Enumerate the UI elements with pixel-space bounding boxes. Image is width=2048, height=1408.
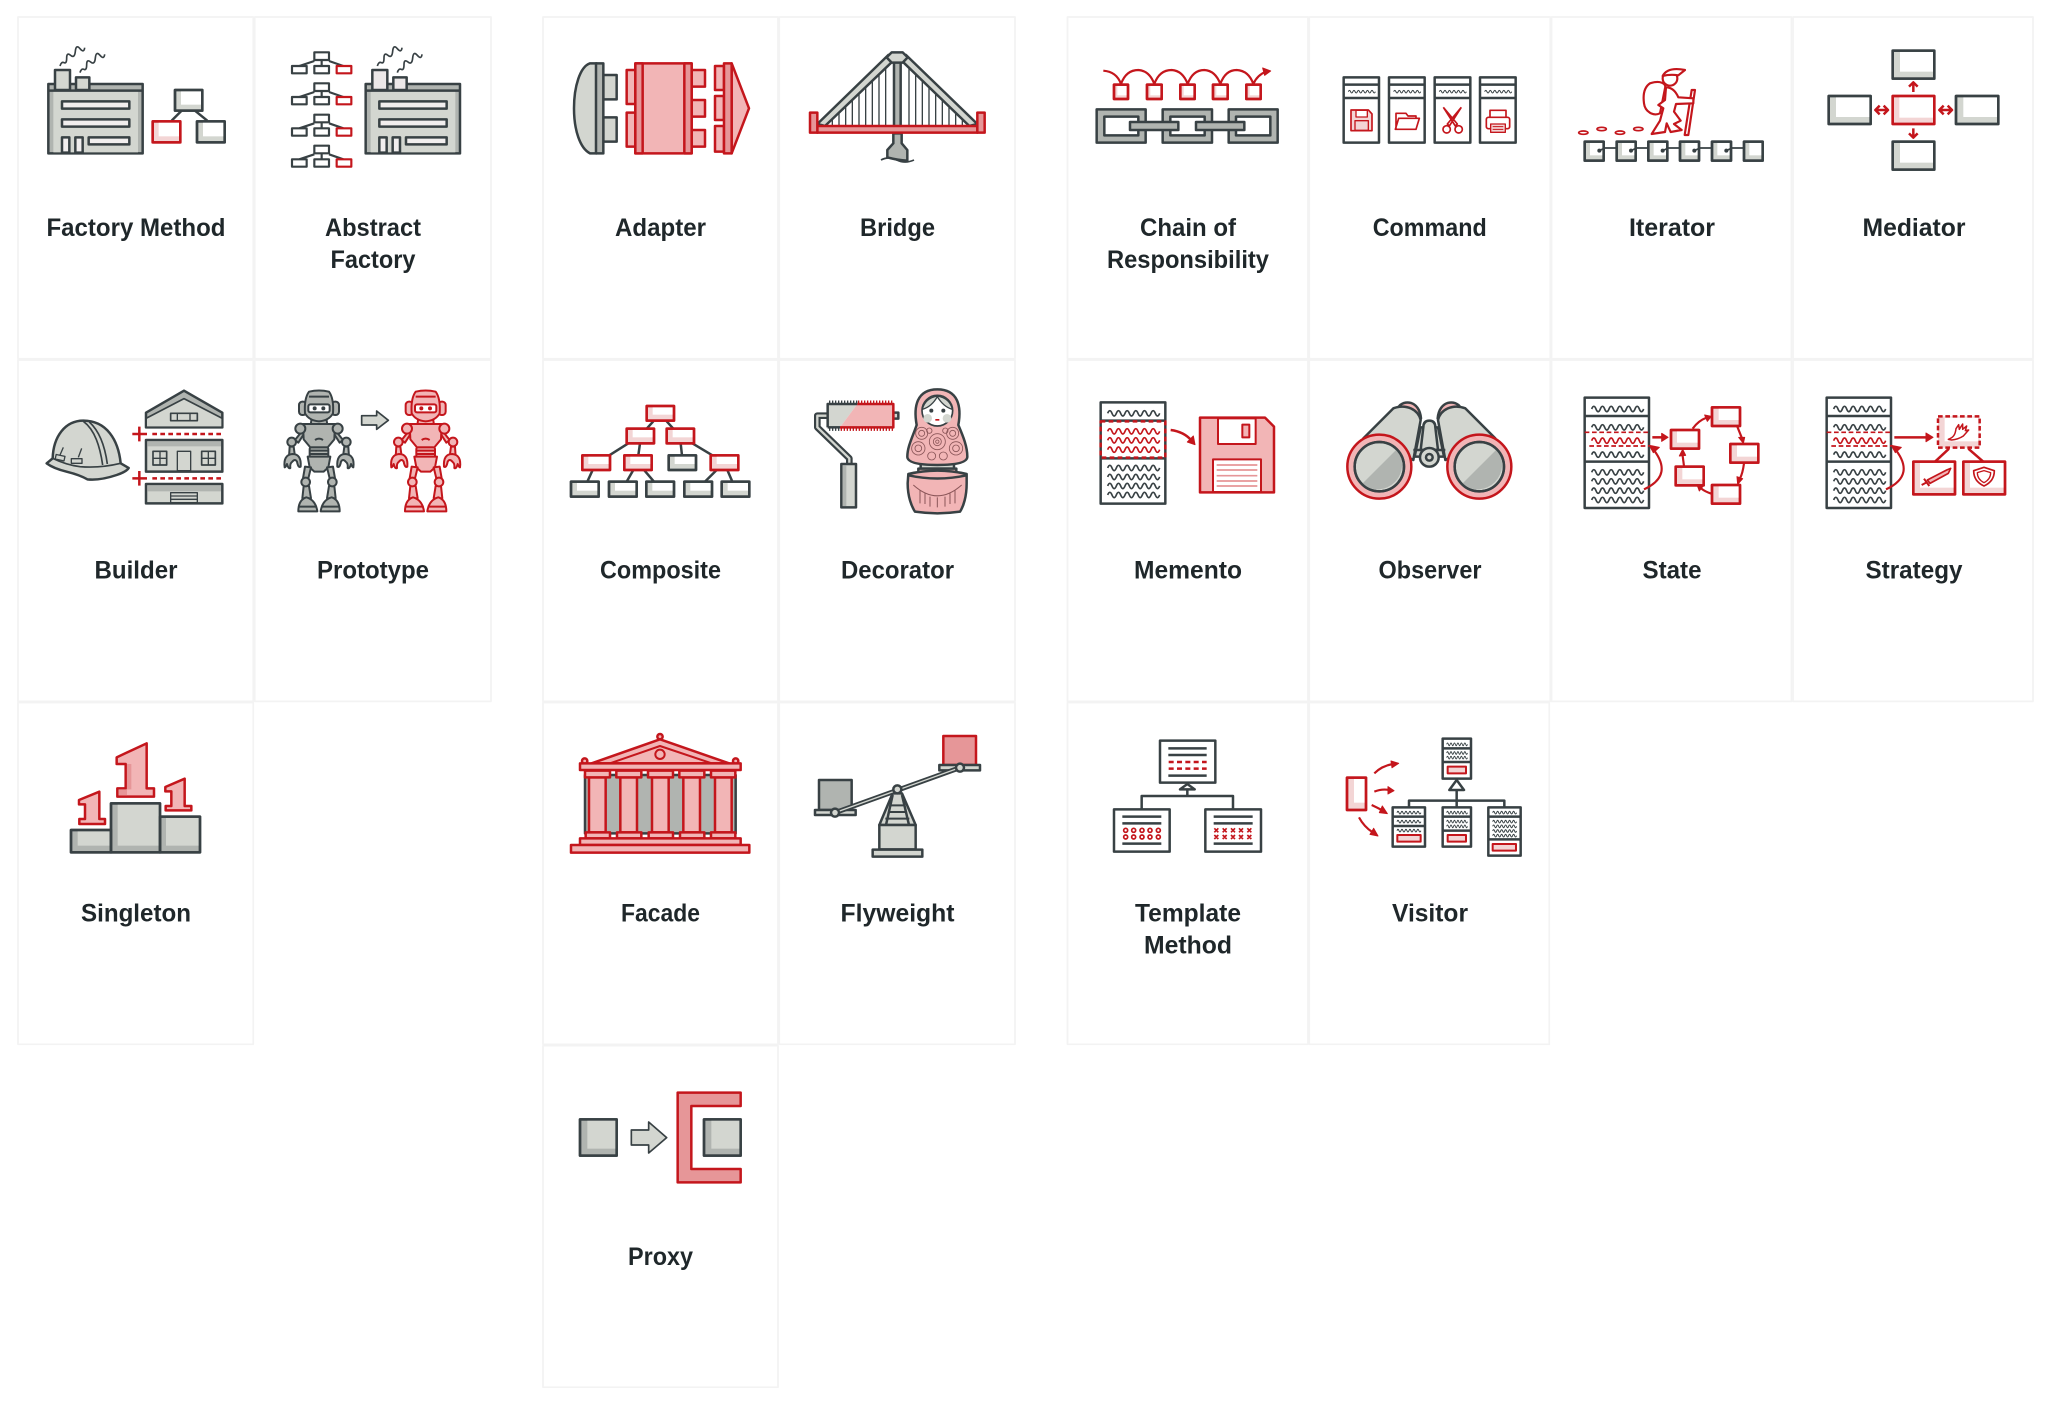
panel: Iterator	[1552, 17, 1792, 359]
icon: hard hat and house parts	[47, 391, 222, 503]
icon: composite tree	[571, 406, 749, 497]
icon: hiker walking on a linked list	[1579, 69, 1763, 161]
label: Chain of Responsibility: Responsibility	[1107, 246, 1269, 274]
icon: binoculars	[1347, 402, 1511, 499]
label: Builder: Builder	[94, 556, 178, 584]
label: Visitor: Visitor	[1392, 900, 1468, 928]
panel: Command	[1309, 17, 1550, 359]
panel: Strategy	[1793, 360, 2033, 701]
label: Abstract Factory: Abstract	[325, 214, 422, 242]
label: Template Method: Method	[1144, 932, 1232, 960]
icon: document with state machine	[1585, 398, 1758, 508]
panel: Composite	[543, 360, 778, 701]
icon: plug adapter	[574, 63, 749, 153]
icon: visitor and class hierarchy	[1347, 739, 1521, 856]
panel: Decorator	[779, 360, 1015, 701]
panel: Mediator	[1793, 17, 2033, 359]
label: Abstract Factory	[325, 214, 422, 274]
icon: seesaw with weights	[815, 736, 980, 857]
label: Bridge: Bridge	[860, 214, 935, 242]
panel: Singleton	[18, 702, 253, 1044]
label: Adapter: Adapter	[615, 214, 706, 242]
icon: paint roller and nesting doll	[817, 389, 967, 513]
panel: Proxy	[543, 1046, 778, 1387]
label: Memento: Memento	[1134, 556, 1242, 584]
icon: template class hierarchy	[1114, 741, 1261, 852]
label: Strategy: Strategy	[1866, 556, 1963, 584]
icon: suspension bridge	[810, 52, 985, 162]
icon: document with strategy options	[1827, 398, 2005, 508]
label: Iterator: Iterator	[1629, 214, 1715, 242]
icon: podium with number ones	[71, 743, 200, 852]
panel: Template Method	[1068, 702, 1308, 1044]
label: State: State	[1642, 556, 1702, 584]
label: Template Method	[1135, 900, 1241, 960]
icon: proxy guarding object	[580, 1093, 741, 1182]
icon: class trees with factory	[292, 47, 460, 167]
panel: Chain of Responsibility	[1068, 17, 1308, 359]
label: Flyweight: Flyweight	[840, 900, 955, 928]
label: Command: Command	[1373, 214, 1487, 242]
label: Chain of Responsibility	[1107, 214, 1269, 274]
icon: mediator hub with arrows	[1829, 51, 1998, 170]
icon: four command cards	[1344, 77, 1516, 143]
panel: Bridge	[779, 17, 1015, 359]
label: Factory Method: Factory Method	[46, 214, 226, 242]
panel: State	[1552, 360, 1792, 701]
icon: classical temple	[571, 734, 749, 853]
icon: two robots with arrow	[284, 390, 460, 511]
label: Chain of Responsibility: Chain of	[1140, 214, 1237, 242]
panel: Observer	[1309, 360, 1550, 701]
panel: Facade	[543, 702, 778, 1044]
label: Prototype: Prototype	[317, 556, 429, 584]
panel: Visitor	[1309, 702, 1549, 1044]
label: Composite: Composite	[600, 556, 721, 584]
label: Observer: Observer	[1378, 556, 1482, 584]
panel: Prototype	[255, 360, 491, 701]
panel: Abstract Factory	[255, 17, 491, 359]
label: Singleton: Singleton	[81, 900, 191, 928]
panel: Adapter	[543, 17, 778, 359]
label: Facade: Facade	[621, 900, 700, 928]
label: Decorator: Decorator	[841, 556, 954, 584]
panel: Builder	[18, 360, 253, 701]
label: Mediator: Mediator	[1862, 214, 1966, 242]
icon: chain with hopping arrow	[1097, 68, 1278, 143]
icon: factory with class tree	[48, 47, 225, 153]
label: Abstract Factory: Factory	[330, 246, 416, 274]
panel: Flyweight	[779, 702, 1015, 1044]
label: Proxy: Proxy	[628, 1243, 693, 1271]
panel: Memento	[1068, 360, 1308, 701]
panel: Factory Method	[18, 17, 253, 359]
label: Template Method: Template	[1135, 900, 1241, 928]
icon: document state saved to floppy	[1101, 402, 1274, 504]
